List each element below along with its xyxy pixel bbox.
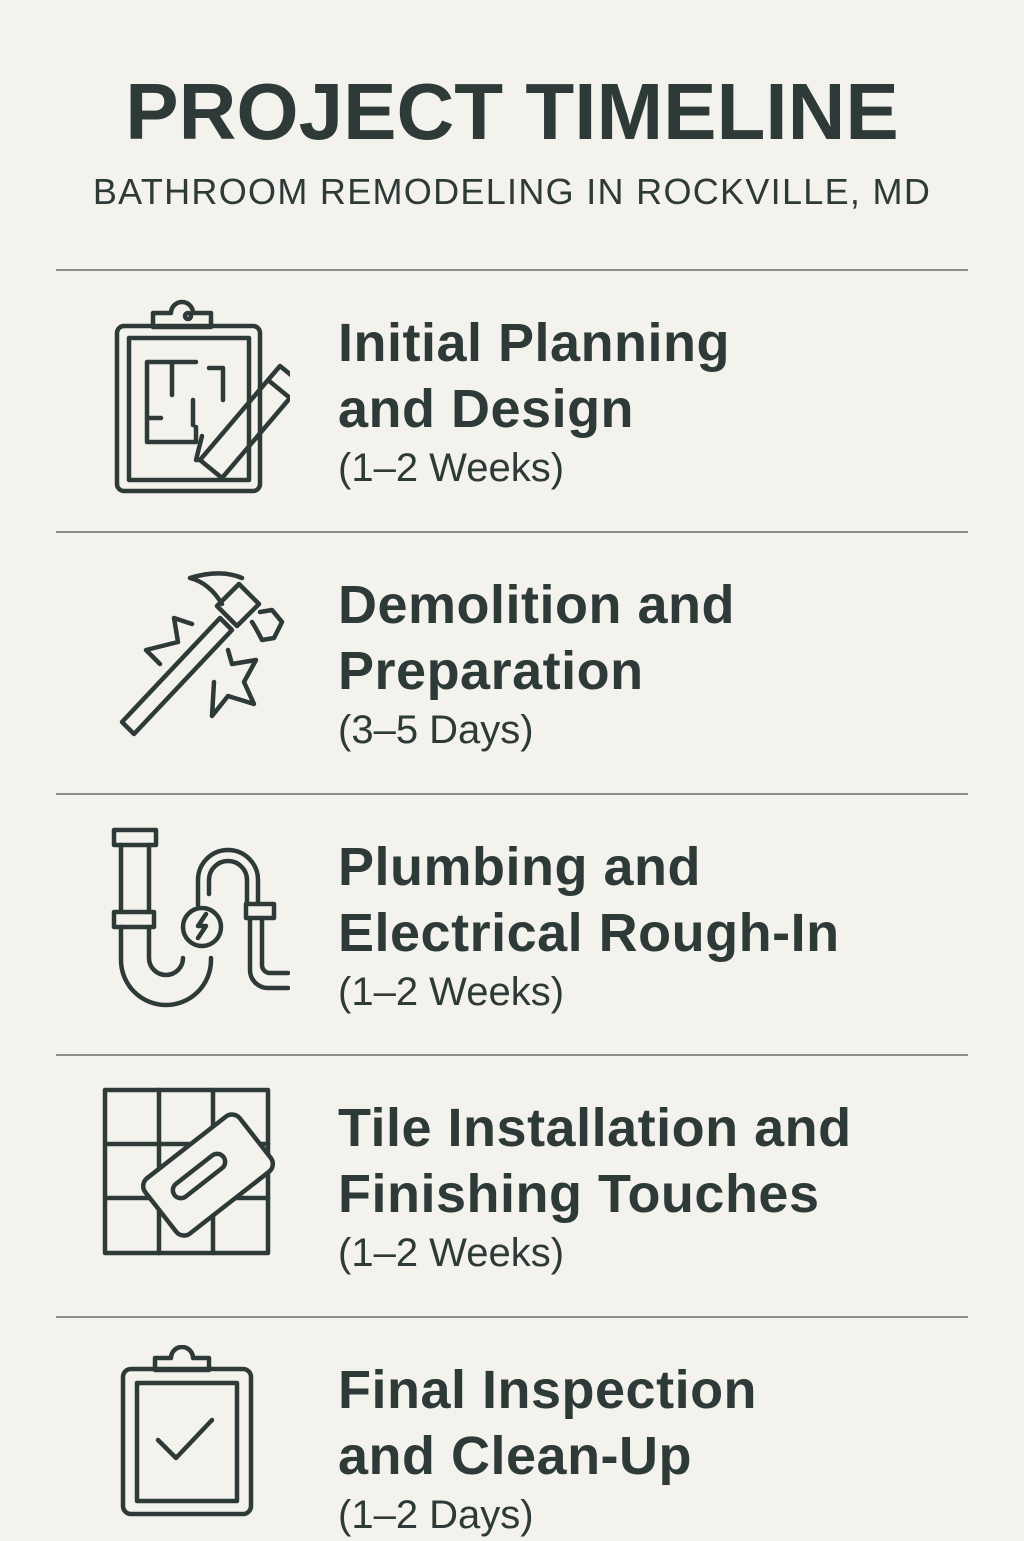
step 4 text <box>338 1098 852 1275</box>
step 3 text: (1–2 Weeks) <box>338 970 564 1014</box>
icon: hammer with impact <box>120 571 284 736</box>
icon: tile grid with trowel <box>102 1088 276 1256</box>
step 1 text: Initial Planning <box>338 313 730 373</box>
step 4 text: Finishing Touches <box>338 1164 820 1224</box>
step 2 text <box>338 575 735 752</box>
step 2 text: Preparation <box>338 641 644 701</box>
step 5 text <box>338 1360 757 1537</box>
title: PROJECT TIMELINE <box>125 67 899 156</box>
step 5 text: and Clean-Up <box>338 1426 692 1486</box>
icon: pipes with electric symbol <box>112 828 290 1008</box>
step 1 text: and Design <box>338 379 634 439</box>
icon: clipboard with checkmark <box>120 1345 254 1516</box>
step 3 text: Plumbing and <box>338 837 701 897</box>
step 5 text: Final Inspection <box>338 1360 757 1420</box>
icon: clipboard with plan and pencil <box>114 300 290 494</box>
step 4 text: Tile Installation and <box>338 1098 852 1158</box>
step 1 text <box>338 313 730 490</box>
step 3 text: Electrical Rough-In <box>338 903 840 963</box>
step 1 text: (1–2 Weeks) <box>338 446 564 490</box>
subtitle: BATHROOM REMODELING IN ROCKVILLE, MD <box>93 171 931 212</box>
step 3 text <box>338 837 840 1014</box>
step 5 text: (1–2 Days) <box>338 1493 534 1537</box>
step 4 text: (1–2 Weeks) <box>338 1231 564 1275</box>
step 2 text: (3–5 Days) <box>338 708 534 752</box>
step 2 text: Demolition and <box>338 575 735 635</box>
